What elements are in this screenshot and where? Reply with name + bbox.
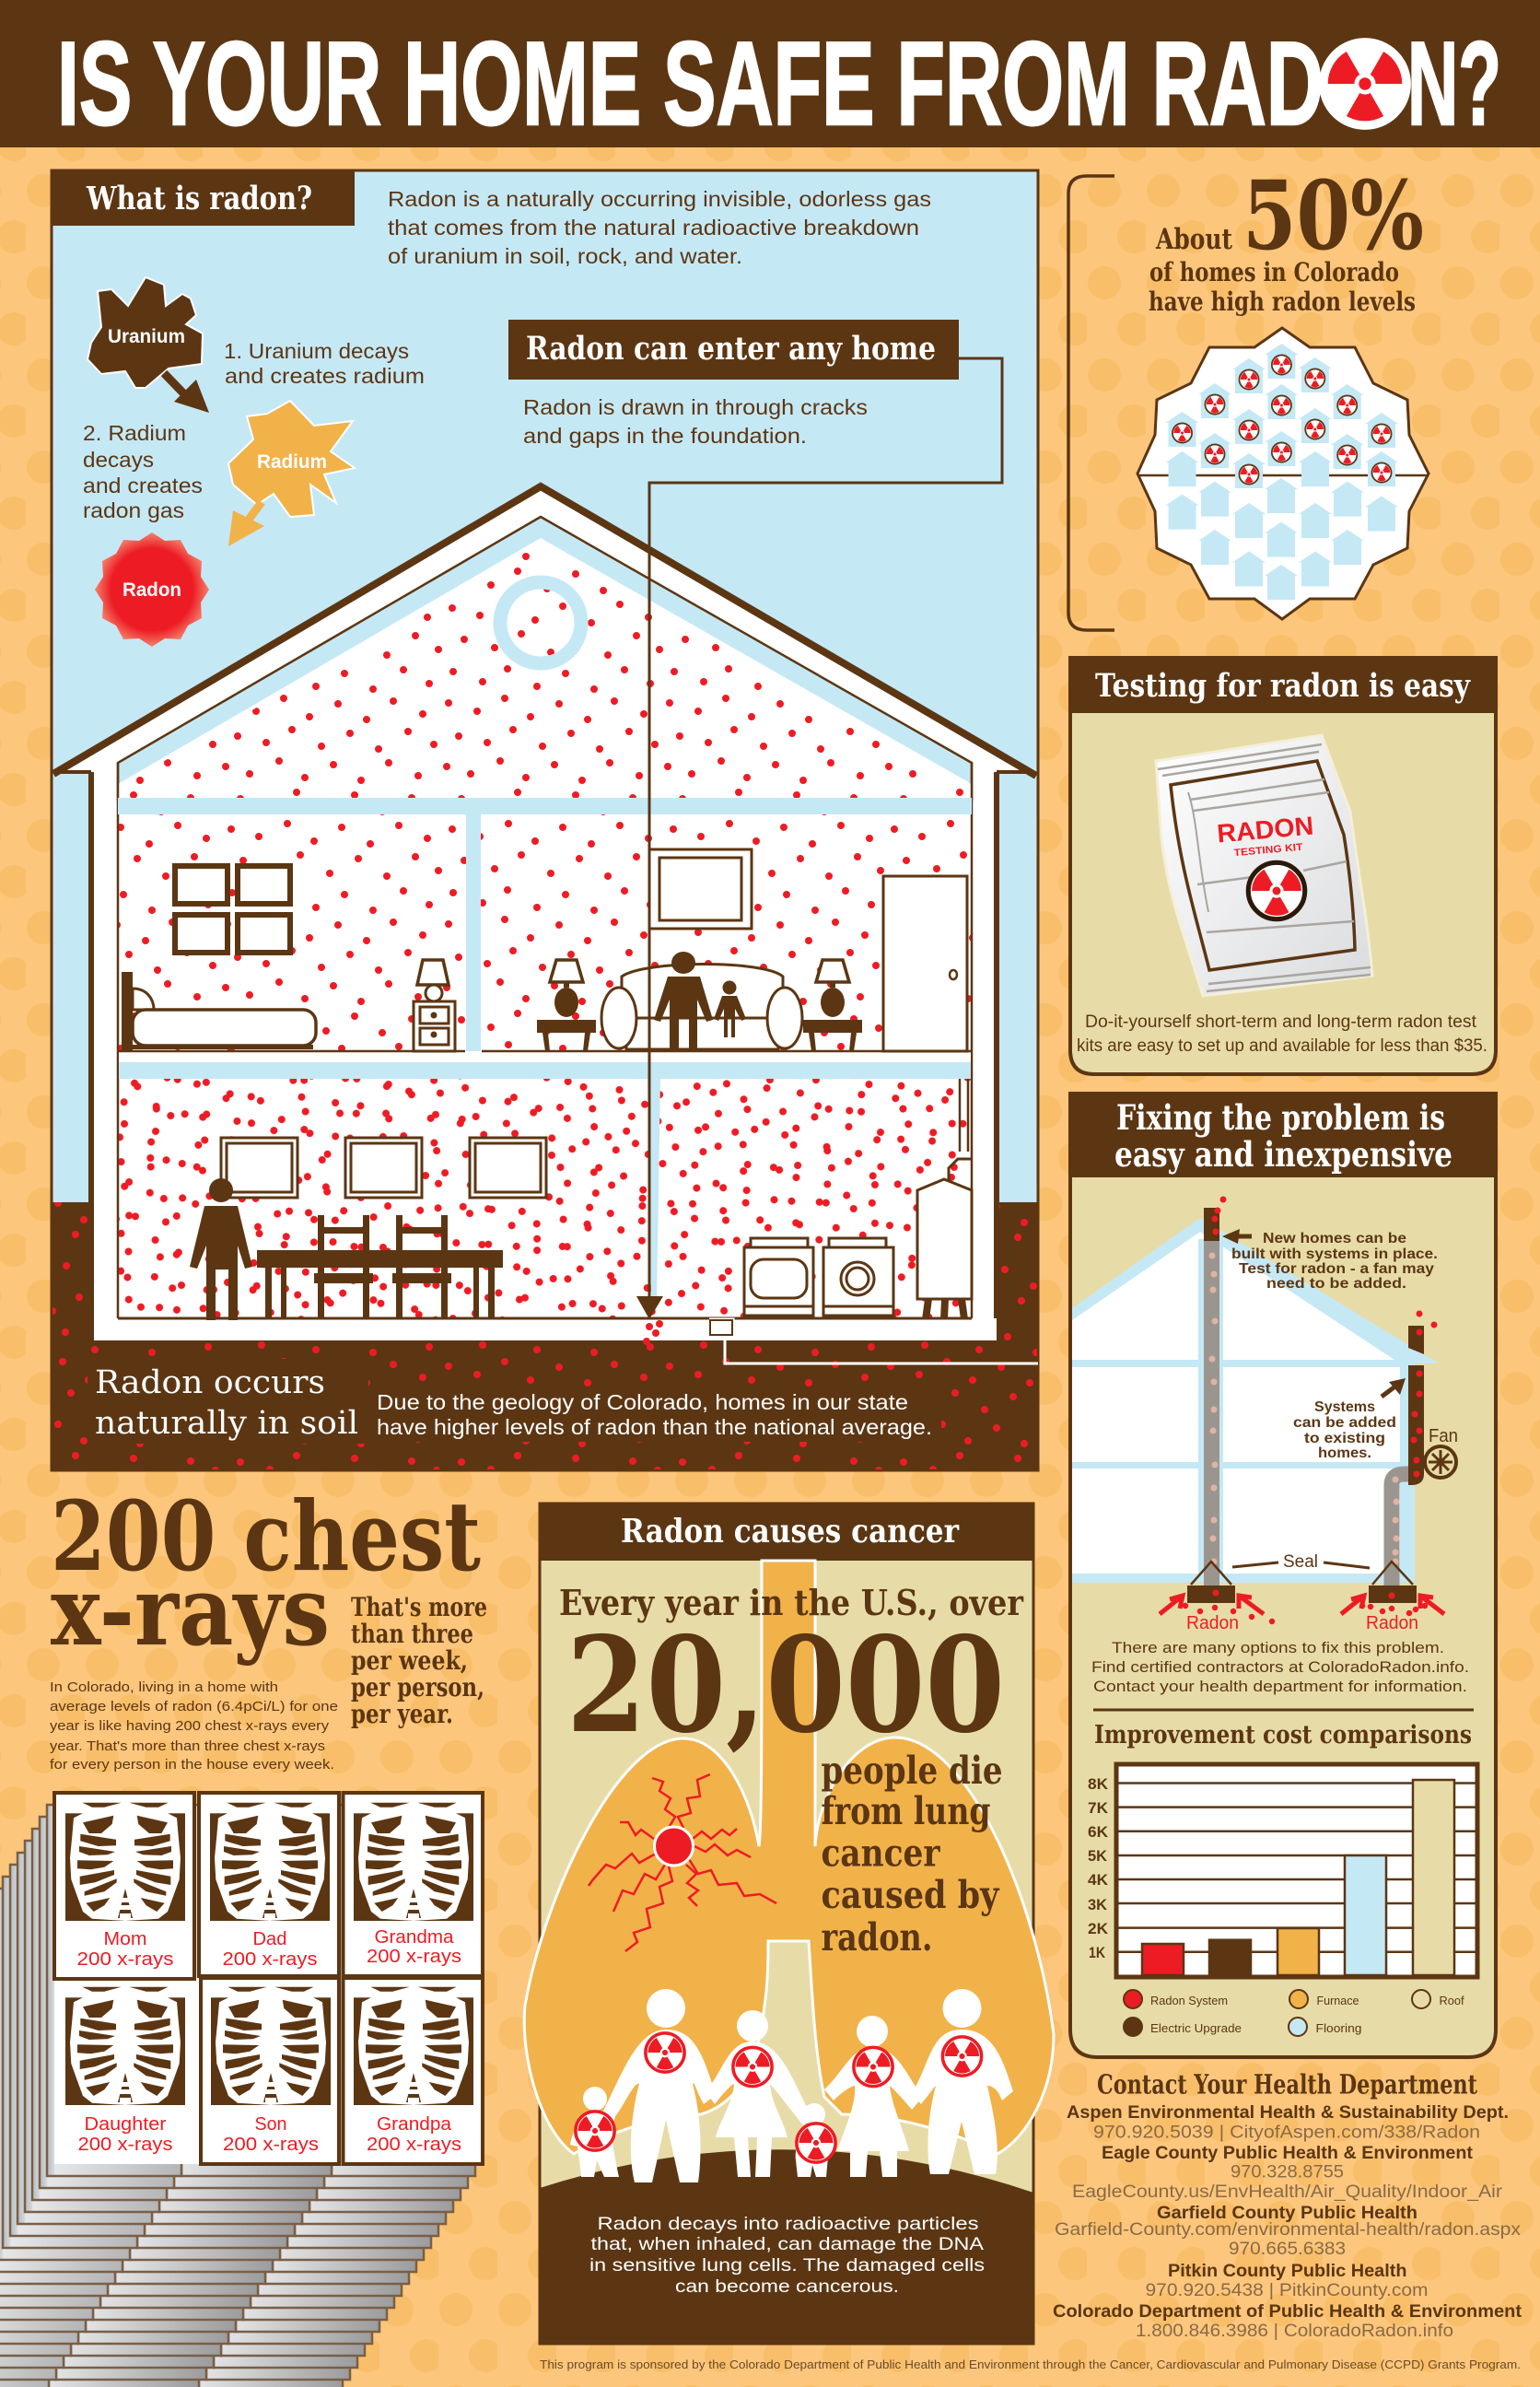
- seals and foundation bases: Seal: [1283, 1552, 1318, 1572]
- text: radon drawn through cracks: and gaps in the foundation.: [523, 424, 807, 448]
- x-ray card: dad: [199, 1793, 339, 1976]
- person at table: [190, 1178, 252, 1320]
- stat: about 50 percent: 50%: [1242, 160, 1424, 272]
- text: step 1: 1. Uranium decays: [224, 339, 409, 363]
- callout: new homes: built with systems in place.: [1231, 1246, 1438, 1262]
- callout: existing homes: can be added: [1293, 1415, 1396, 1431]
- text: x-ray explanation: year. That's more than three chest x-rays: [50, 1738, 325, 1754]
- text: more than three per week: than three: [351, 1619, 473, 1649]
- heading: radon causes cancer: Radon causes cancer: [621, 1513, 960, 1550]
- x-ray card: son: Son: [254, 2114, 287, 2135]
- right radon pipe and fan: [1392, 1314, 1458, 1588]
- text: people die: people die: [822, 1749, 1002, 1793]
- stat: about 50 percent: of homes in Colorado: [1149, 257, 1399, 287]
- text: radon definition: that comes from the natural radioactive breakdown: [388, 216, 919, 240]
- attic window: [500, 582, 581, 663]
- chart legend: Electric Upgrade: [1150, 2021, 1242, 2035]
- heading: what is radon: [52, 170, 355, 226]
- text: step 2: 2. Radium: [83, 421, 186, 445]
- callout: existing homes: Systems: [1314, 1399, 1375, 1415]
- chart legend: Furnace: [1317, 1994, 1359, 2007]
- y axis labels: [1088, 1775, 1109, 1961]
- x-ray card: grandma: [343, 1793, 483, 1976]
- icon: uranium: [88, 277, 209, 413]
- y axis labels: 4K: [1088, 1871, 1109, 1889]
- y axis labels: 2K: [1088, 1920, 1109, 1937]
- text: step 1: and creates radium: [225, 364, 425, 388]
- icon: radon: [95, 532, 209, 647]
- chart legend: [1124, 1990, 1464, 2036]
- ground: [540, 2149, 1033, 2344]
- chart legend: Roof: [1439, 1994, 1464, 2007]
- text: how radon damages cells: [589, 2215, 985, 2297]
- figure: child left: [570, 2087, 619, 2177]
- text: people die: cancer: [822, 1831, 941, 1876]
- y axis labels: 5K: [1088, 1847, 1108, 1865]
- stat: about 50 percent: [1149, 160, 1424, 317]
- icon: uranium: Uranium: [108, 326, 185, 347]
- heading: radon occurs naturally in soil: Radon occurs: [95, 1364, 325, 1401]
- contact list: 970.920.5438 | PitkinCounty.com: [1146, 2281, 1428, 2300]
- heading: fixing: easy and inexpensive: [1114, 1134, 1452, 1175]
- text: x-ray explanation: [50, 1679, 338, 1773]
- x-ray card: daughter: Daughter: [85, 2114, 167, 2135]
- x-ray card: grandma: 200 x-rays: [367, 1947, 461, 1967]
- stat: 200 chest x-rays: x-rays: [51, 1554, 330, 1667]
- contact list: Pitkin County Public Health: [1168, 2262, 1407, 2281]
- x-ray card: grandpa: [343, 1978, 483, 2164]
- text: every year: Every year in the U.S., over: [559, 1582, 1024, 1623]
- text: how radon damages cells: Radon decays into radioactive particles: [597, 2215, 978, 2234]
- panel: 50 percent of homes: [1068, 160, 1429, 630]
- y axis labels: 8K: [1088, 1775, 1109, 1793]
- text: radon drawn through cracks: Radon is drawn in through cracks: [523, 395, 868, 419]
- text: people die: from lung: [822, 1789, 991, 1833]
- text: more than three per week: per year.: [351, 1699, 453, 1729]
- text: colorado geology: Due to the geology of Colorado, homes in our state: [377, 1390, 908, 1414]
- dining table and chairs: [257, 1215, 503, 1318]
- stat: about 50 percent: have high radon levels: [1149, 287, 1416, 317]
- text: step 2: [83, 421, 203, 522]
- x-ray card: son: [201, 1978, 339, 2164]
- chart legend: Radon System: [1150, 1994, 1228, 2007]
- x-ray card: mom: Mom: [103, 1929, 147, 1949]
- text: x-ray explanation: In Colorado, living in a home with: [50, 1679, 278, 1695]
- text: people die: [822, 1749, 1002, 1960]
- text: x-ray explanation: average levels of radon (6.4pCi/L) for one: [50, 1699, 338, 1714]
- panel: what is radon house: [52, 170, 1038, 1470]
- x-ray card: dad: 200 x-rays: [223, 1949, 317, 1970]
- contact list: Aspen Environmental Health & Sustainability Dept.: [1067, 2103, 1509, 2123]
- text: x-ray explanation: for every person in the house every week.: [50, 1757, 334, 1773]
- callout: existing homes: to existing: [1304, 1431, 1385, 1446]
- x-ray card: grandpa: Grandpa: [377, 2114, 452, 2135]
- bar: furnace: [1278, 1928, 1319, 1975]
- text: options to fix: [1091, 1639, 1469, 1695]
- water heater: [917, 1079, 972, 1319]
- figure: grandfather: [912, 1989, 1013, 2174]
- lungs: [524, 1561, 1054, 2154]
- contact list: Eagle County Public Health & Environment: [1102, 2144, 1474, 2163]
- text: x-ray explanation: year is like having 200 chest x-rays every: [50, 1718, 330, 1734]
- x-ray card: daughter: 200 x-rays: [77, 2135, 173, 2155]
- y axis labels: 7K: [1088, 1799, 1109, 1817]
- panel: testing for radon is easy: [1068, 658, 1498, 1074]
- figure: child center: [796, 2103, 835, 2177]
- stat: about 50 percent: About: [1155, 223, 1233, 256]
- text: more than three per week: per person,: [351, 1672, 484, 1702]
- text: step 2: radon gas: [83, 498, 184, 522]
- x-ray card: son: 200 x-rays: [223, 2135, 319, 2155]
- heading: improvement cost comparisons: Improvement cost comparisons: [1094, 1720, 1472, 1749]
- heading: what is radon: What is radon?: [86, 180, 312, 217]
- text: step 2: and creates: [83, 474, 203, 497]
- x-ray card: mom: 200 x-rays: [77, 1949, 173, 1970]
- family silhouettes exposed to radon: [570, 1989, 1013, 2182]
- bar: electric upgrade: [1209, 1940, 1251, 1975]
- contact list: [1053, 2103, 1522, 2341]
- text: how radon damages cells: can become cancerous.: [675, 2277, 899, 2297]
- right radon pipe and fan: Fan: [1429, 1426, 1458, 1446]
- seals and foundation bases: [1187, 1552, 1417, 1603]
- contact list: 970.665.6383: [1229, 2240, 1346, 2259]
- text: more than three per week: [351, 1592, 487, 1729]
- bar: roof: [1413, 1780, 1454, 1975]
- contact list: EagleCounty.us/EnvHealth/Air_Quality/Indoor_Air: [1072, 2182, 1503, 2202]
- mitigation house diagram: [1072, 1199, 1458, 1633]
- homes without high radon: [1166, 451, 1398, 600]
- panel: radon causes cancer: [524, 1504, 1054, 2344]
- heading: fixing: Fixing the problem is: [1116, 1097, 1445, 1138]
- icon: tumor with zigzag rays: [589, 1774, 776, 1951]
- text: colorado geology: have higher levels of radon than the national average.: [377, 1415, 932, 1439]
- icon: radon testing kit: [1156, 735, 1372, 996]
- icon: radon: Radon: [122, 579, 181, 601]
- text: radon definition: [388, 187, 931, 268]
- x-ray card: dad: Dad: [252, 1929, 287, 1949]
- y axis labels: 6K: [1088, 1823, 1109, 1841]
- text: colorado geology: [377, 1390, 932, 1439]
- callout: existing homes: homes.: [1318, 1445, 1371, 1461]
- text: step 2: decays: [83, 448, 154, 472]
- people on sofa: [654, 952, 746, 1050]
- text: radon drawn through cracks: [523, 395, 868, 448]
- red radon arrows: [1160, 1596, 1444, 1621]
- text: how radon damages cells: that, when inhaled, can damage the DNA: [591, 2235, 984, 2254]
- text: step 1: [224, 339, 425, 388]
- mitigation house diagram: Radon: [1186, 1613, 1239, 1633]
- text: radon definition: Radon is a naturally occurring invisible, odorless gas: [388, 187, 931, 211]
- icon: radon testing kit: RADON: [1216, 811, 1314, 848]
- callout: new homes: New homes can be: [1263, 1231, 1406, 1246]
- text: radon definition: of uranium in soil, rock, and water.: [388, 244, 742, 268]
- figure: grandmother: [824, 2016, 923, 2177]
- text: how radon damages cells: in sensitive lung cells. The damaged cells: [589, 2256, 985, 2276]
- contact list: 970.328.8755: [1231, 2163, 1344, 2182]
- colorado homes map: [1138, 328, 1429, 619]
- stat: 20,000: 20,000: [566, 1608, 1005, 1762]
- y axis labels: 3K: [1088, 1896, 1108, 1913]
- icon: radium: [228, 401, 355, 546]
- contact list: Garfield County Public Health: [1157, 2204, 1418, 2223]
- text: options to fix: Find certified contractors at ColoradoRadon.info.: [1091, 1658, 1469, 1676]
- mitigation house diagram: Radon: [1366, 1613, 1418, 1633]
- callout: new homes: need to be added.: [1266, 1276, 1406, 1292]
- figure: mother: [706, 2010, 812, 2177]
- panel: fixing the problem: [1068, 1094, 1498, 2057]
- icon: radium: Radium: [257, 451, 327, 473]
- figure: father: [603, 1989, 716, 2182]
- contact your health department: [1053, 2069, 1522, 2341]
- text: options to fix: There are many options to fix this problem.: [1112, 1639, 1444, 1656]
- heading: radon can enter any home: Radon can enter any home: [526, 330, 936, 368]
- footer sponsor note: This program is sponsored by the Colorado Department of Public Health and Environment through the Cancer, Cardiovascular and Pulmonary Disease (CCPD) Grants Program.: [540, 2358, 1521, 2371]
- bedroom furniture: [122, 866, 455, 1051]
- text: kit caption: [1077, 1012, 1488, 1056]
- heading: radon occurs naturally in soil: [95, 1364, 358, 1442]
- text: more than three per week: That's more: [351, 1592, 487, 1622]
- x-ray card: daughter: [54, 1978, 202, 2164]
- contact list: 1.800.846.3986 | ColoradoRadon.info: [1136, 2322, 1453, 2341]
- callout: new homes: [1222, 1229, 1438, 1292]
- ground floor furniture: [190, 1079, 972, 1320]
- stat: 200 chest x-rays: 200 chest: [51, 1480, 481, 1593]
- bar chart: improvement costs: [1088, 1764, 1477, 1977]
- living room furniture: [537, 849, 967, 1051]
- washer and dryer: [744, 1238, 893, 1316]
- radon pipe: [709, 1319, 1038, 1363]
- heading: testing: Testing for radon is easy: [1095, 667, 1471, 705]
- text: more than three per week: per week,: [351, 1645, 468, 1676]
- bar: radon system: [1142, 1944, 1184, 1975]
- callout: existing homes: [1293, 1378, 1406, 1461]
- bracket: [1068, 176, 1114, 630]
- title banner: O: [1324, 18, 1406, 150]
- x-ray card: grandma: Grandma: [374, 1927, 454, 1948]
- contact list: Garfield-County.com/environmental-health/radon.aspx: [1055, 2220, 1522, 2240]
- contact list: 970.920.5039 | CityofAspen.com/338/Radon: [1093, 2124, 1480, 2143]
- x-ray card: grandpa: 200 x-rays: [367, 2135, 461, 2155]
- text: options to fix: Contact your health department for information.: [1093, 1678, 1467, 1695]
- heading: radon can enter any home: [508, 320, 959, 380]
- bar: flooring: [1345, 1855, 1386, 1975]
- heading: fixing: [1114, 1097, 1452, 1175]
- soil with radon: [52, 1202, 1037, 1469]
- icon: radon testing kit: TESTING KIT: [1233, 842, 1303, 859]
- homes with high radon: [1166, 344, 1398, 488]
- text: people die: radon.: [822, 1915, 932, 1960]
- stat: 200 chest x-rays: [51, 1480, 481, 1667]
- heading: radon occurs naturally in soil: naturally in soil: [95, 1405, 358, 1442]
- y axis labels: 1K: [1089, 1944, 1106, 1961]
- chart legend: Flooring: [1315, 2021, 1361, 2035]
- panel: 200 chest x-rays: [0, 1480, 487, 2387]
- left radon pipe: [1204, 1199, 1223, 1588]
- text: kit caption: Do-it-yourself short-term and long-term radon test: [1085, 1012, 1477, 1032]
- stack of x-ray sheets: [0, 1805, 475, 2387]
- contact list: Colorado Department of Public Health & Environment: [1053, 2302, 1522, 2322]
- connector arrow: radon entry path: [636, 358, 1002, 1319]
- house cross section: [53, 486, 1038, 1363]
- callout: new homes: Test for radon - a fan may: [1239, 1261, 1434, 1277]
- text: people die: caused by: [822, 1873, 999, 1917]
- text: kit caption: kits are easy to set up and available for less than $35.: [1077, 1036, 1488, 1056]
- x-ray card: mom: [54, 1793, 194, 1979]
